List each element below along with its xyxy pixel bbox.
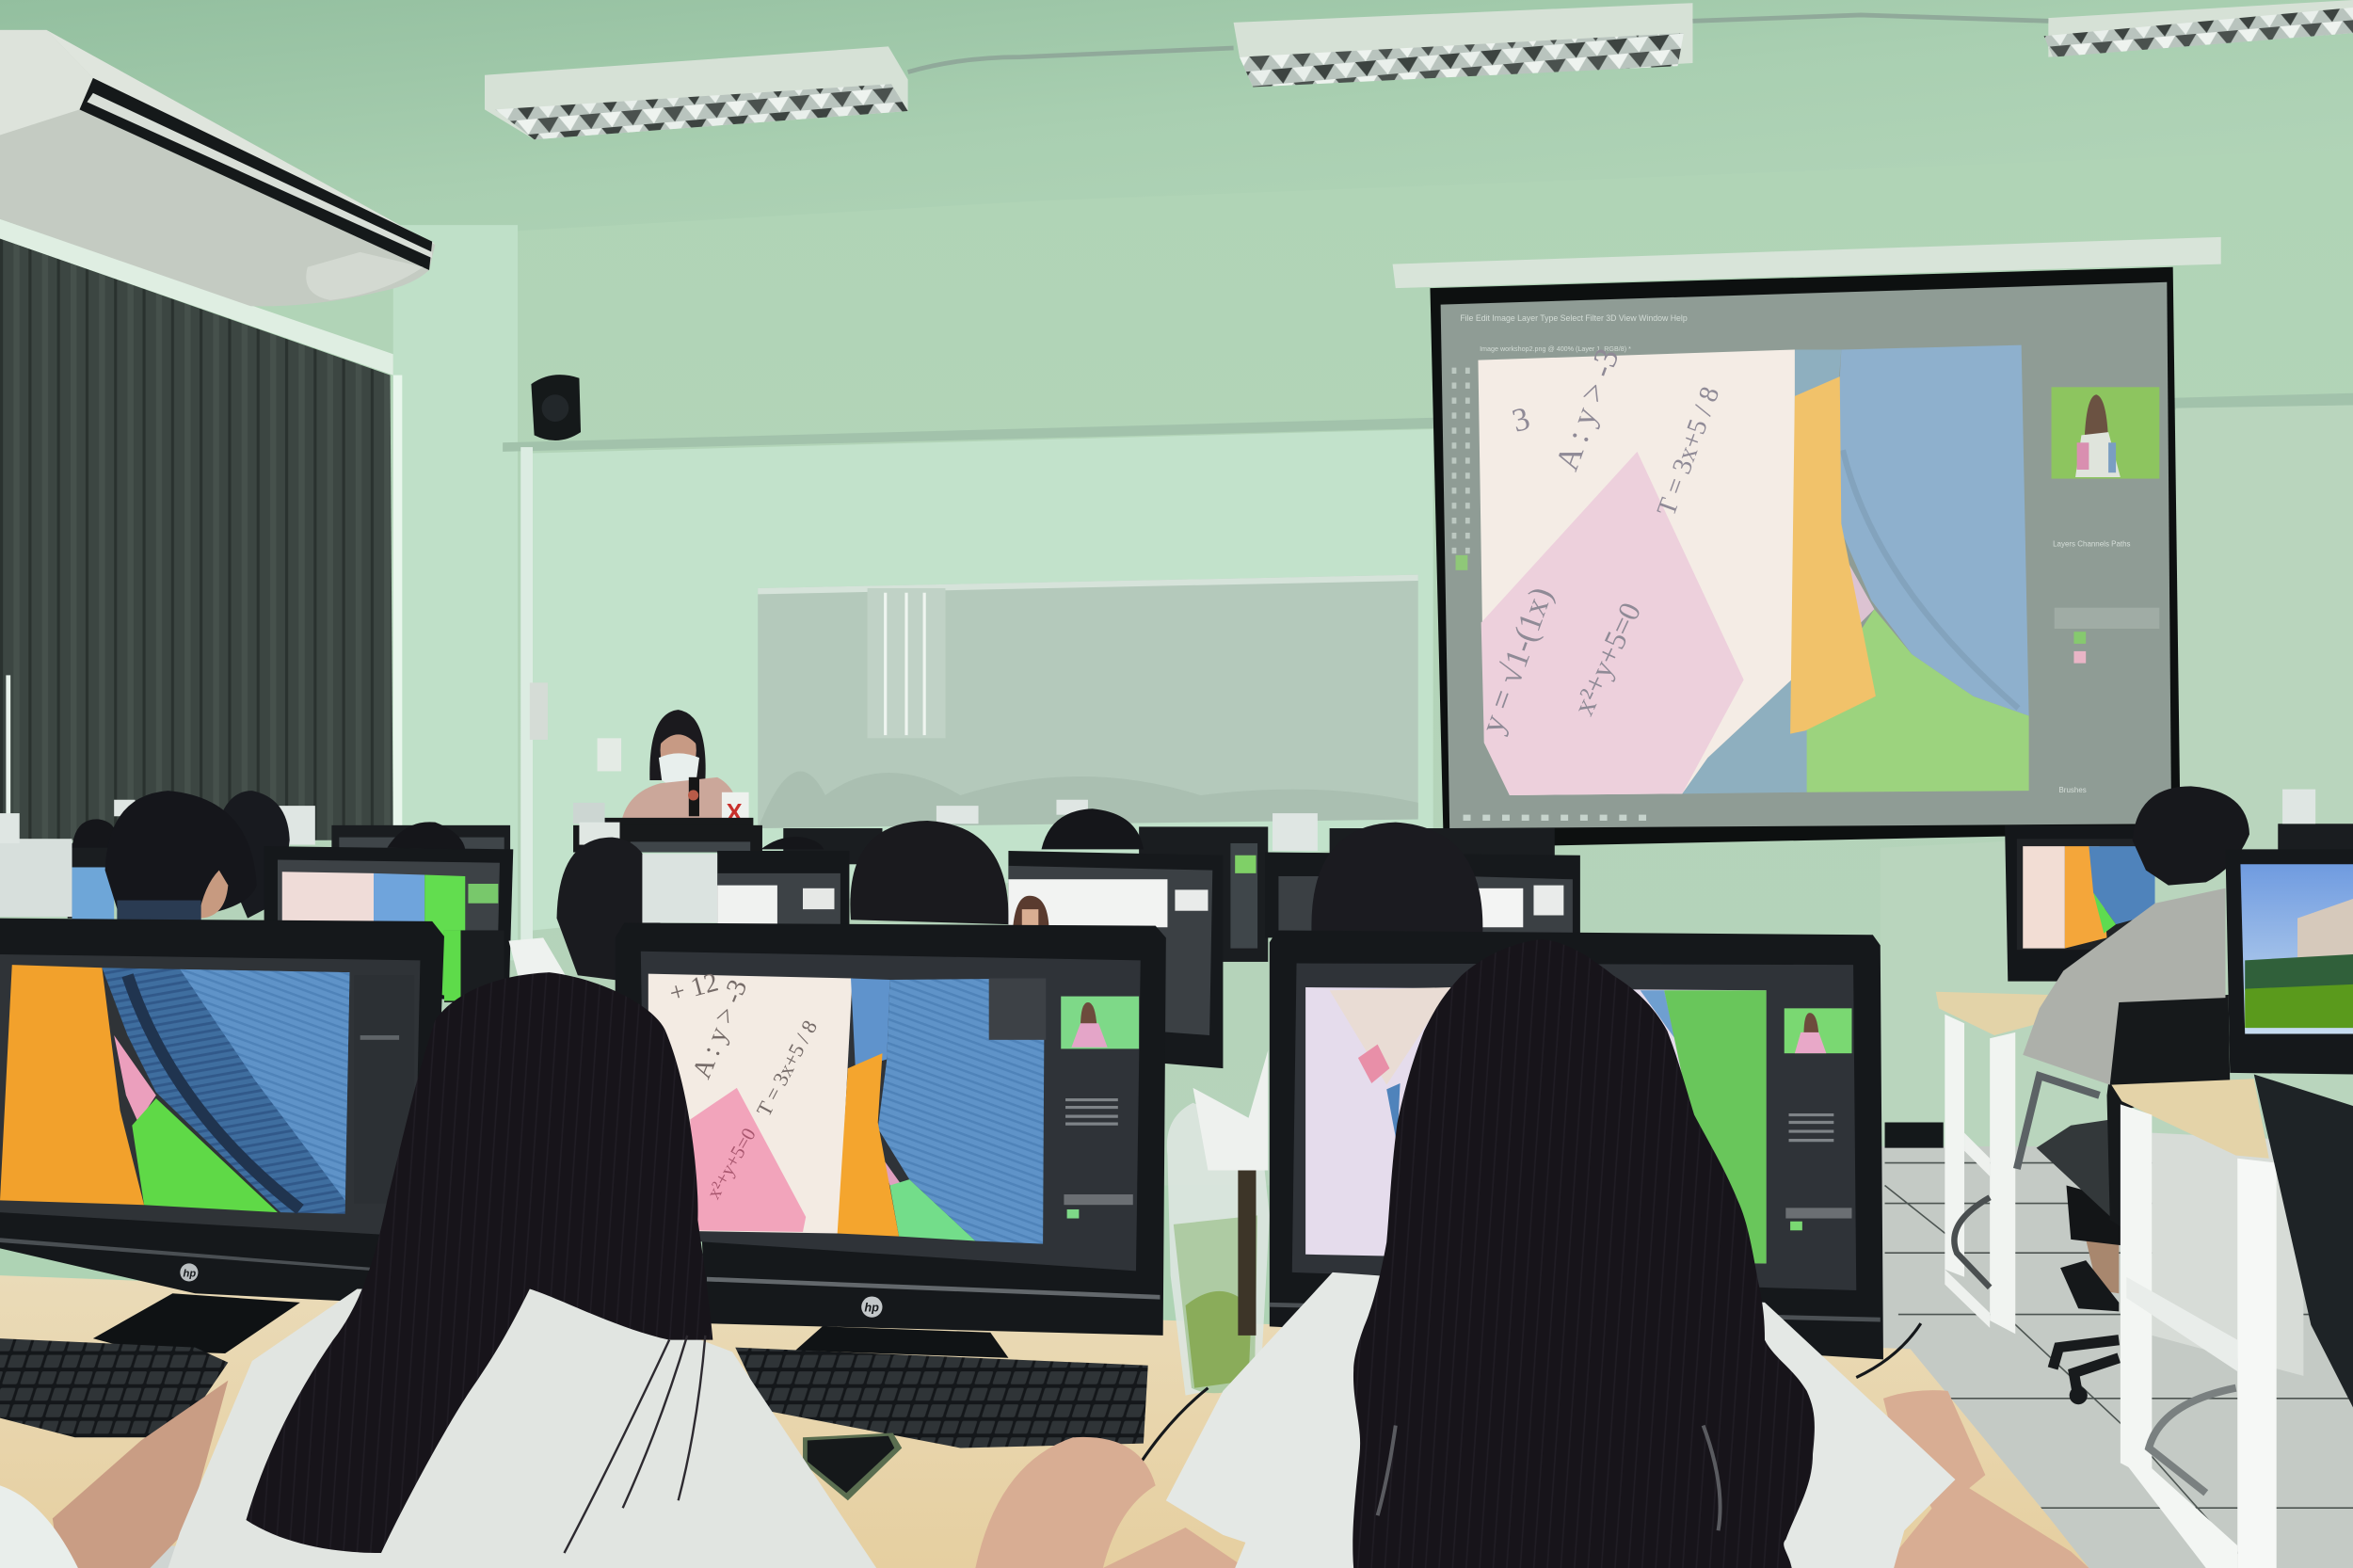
projected fabric fold: [1843, 450, 2018, 708]
ceiling light left: [485, 46, 908, 139]
screen: green background: [1664, 990, 1767, 1263]
front centre monitor: [616, 922, 1166, 1358]
lectern: [605, 818, 753, 826]
screen: blue knit fabric: [102, 968, 349, 1214]
window blinds: [0, 238, 393, 840]
neighbouring white sleeve: [1193, 1050, 1268, 1171]
left hand on mouse: [975, 1437, 1156, 1568]
screen handwriting: x²+y+5=0: [703, 1125, 760, 1203]
projected document tab: Image workshop2.png @ 400% (Layer 1, RGB/8) *: [1480, 345, 1631, 353]
front left keyboard: [0, 1338, 228, 1437]
screen: blue behind: [851, 978, 889, 1068]
right arm: [1883, 1480, 2089, 1568]
left forearm: [53, 1381, 228, 1568]
projected handwriting: [1473, 344, 1725, 738]
loose hair strands: [564, 1336, 705, 1553]
monitor stand: [93, 1293, 300, 1353]
projected orange note: [1790, 376, 1876, 734]
rear student small head: [387, 822, 465, 849]
hp logo: hp: [864, 1300, 879, 1314]
long black hair: [1353, 939, 1815, 1568]
back of person in foreground: [141, 1545, 381, 1568]
projected handwriting: y = √1-(1x): [1473, 583, 1560, 738]
rear monitor left: [264, 846, 513, 1002]
screen: pink note: [690, 1088, 806, 1232]
projected pink corner: [1846, 558, 1874, 623]
right student seated: [2017, 786, 2249, 1404]
shorts: [2066, 1185, 2121, 1245]
right rear desk: [1936, 992, 2050, 1334]
hp logo: [861, 1296, 883, 1318]
screen: side panel: [354, 975, 414, 1204]
rear student with glasses: [105, 791, 290, 921]
screen: orange note: [0, 965, 144, 1205]
ceiling: [0, 0, 2353, 232]
wall switches: [530, 682, 621, 771]
hp logo: [180, 1263, 198, 1281]
ceiling conduit: [908, 15, 2048, 72]
screen handwriting: + 12: [666, 967, 721, 1009]
shirt: [2023, 888, 2225, 1085]
chair back: [2107, 995, 2230, 1227]
screen: blue top: [1641, 990, 1674, 1038]
rear monitor centre: [1008, 851, 1223, 1068]
shirt: [168, 1288, 876, 1568]
small head behind: [760, 837, 824, 849]
rear student dark hair right: [1311, 823, 1482, 934]
screen: orange note: [838, 1053, 899, 1237]
ceiling light right: [2044, 0, 2353, 57]
projected navigator thumbnail: [2052, 387, 2159, 479]
screen handwriting: [666, 967, 822, 1203]
screen: layer rows: [1065, 1100, 1118, 1124]
screen: paper: [648, 974, 853, 1233]
monitor stand: [795, 1326, 1008, 1358]
rear paper sign centre: [642, 854, 717, 922]
floor: [1846, 1123, 2353, 1568]
right desktop monitor: [2225, 849, 2353, 1074]
projected handwriting: T = 3x+5 / 8: [1651, 383, 1725, 520]
right rear monitor: [2005, 825, 2155, 982]
chair armrest: [2017, 1076, 2100, 1169]
ceiling light centre: [1234, 3, 1692, 87]
projected handwriting: 3: [1508, 400, 1533, 440]
projected pink note: [1481, 452, 1744, 795]
shirt: [1166, 1272, 1955, 1568]
screen: green area: [132, 1098, 278, 1212]
front right monitor: [1270, 930, 1883, 1359]
screen: thumbnail: [1785, 1008, 1851, 1053]
screen: blue sweater: [878, 978, 1045, 1244]
screen: blue sliver: [1386, 1083, 1401, 1144]
projected handwriting: x²+y+5=0: [1567, 598, 1647, 720]
projected layer panel: [2053, 539, 2159, 794]
screen: lavender canvas: [1305, 987, 1767, 1263]
left side wall: [393, 225, 518, 960]
right lower wall: [1881, 405, 2353, 1156]
screen: thumbnail: [1061, 997, 1139, 1048]
projector screen housing: [1393, 237, 2221, 288]
projected handwriting: A : y > -3: [1548, 344, 1626, 475]
gap rear monitor: [444, 930, 504, 1002]
second lectern paper: [579, 823, 619, 845]
bezel stripe: [707, 1277, 1160, 1300]
screen: green background: [889, 1179, 975, 1240]
window blind highlight: [6, 675, 10, 825]
smartphone: [803, 1433, 902, 1500]
rear monitor centre-right: [1265, 853, 1580, 937]
leg: [2086, 1240, 2119, 1293]
projected layer panel: Brushes: [2059, 786, 2087, 794]
bezel stripe: [0, 1238, 376, 1271]
back wall: [0, 135, 2353, 1185]
conduit pipe: [520, 447, 533, 942]
air conditioner: [0, 30, 435, 306]
left forearm: [1103, 1528, 1245, 1568]
screen handwriting: A : y > -3: [686, 975, 753, 1082]
screen: pink sheet: [114, 1035, 156, 1123]
rear student dark hair centre: [850, 808, 1144, 924]
blind pelmet: [0, 219, 393, 376]
projection screen: [1430, 267, 2181, 848]
whiteboard: [758, 575, 1418, 828]
speaker: [531, 375, 581, 440]
lower wall panel: [533, 429, 1433, 930]
screen: fabric fold: [128, 975, 300, 1209]
red X card: X: [727, 800, 743, 826]
chair base: [2053, 1340, 2119, 1404]
rear student centre-left: [508, 838, 661, 983]
front right student: [975, 939, 2089, 1568]
paper sign near lectern: [573, 803, 605, 824]
plastic cup: [1167, 1103, 1270, 1396]
bezel stripe: [1270, 1303, 1881, 1322]
far row monitors: [68, 824, 2353, 962]
cables: [1141, 1323, 1921, 1463]
projected green: [1807, 609, 2029, 792]
projected canvas blue base: [1682, 349, 1841, 793]
projected app menu: File Edit Image Layer Type Select Filter 3D View Window Help: [1460, 313, 1688, 323]
long black hair: [246, 972, 712, 1553]
hp logo: hp: [184, 1269, 196, 1280]
far monitor behind lectern: [573, 825, 762, 853]
head: [2133, 786, 2249, 886]
wall rail line: [503, 393, 2353, 452]
right front desk: [2111, 1079, 2303, 1568]
hair highlights: [1378, 1426, 1721, 1530]
projected paper: [1478, 349, 1795, 795]
screen: paper corner: [1330, 987, 1451, 1085]
screen: history panel: [989, 978, 1046, 1040]
front desk: [0, 1275, 2089, 1568]
screen: binder clip: [1358, 1045, 1389, 1083]
projected toolbar: [1454, 368, 1467, 563]
rear student far left: [72, 819, 118, 921]
right hand: [1883, 1390, 1985, 1515]
front left student: [0, 972, 876, 1568]
right office chair: [2254, 1074, 2353, 1407]
paper signs: [0, 790, 2315, 917]
red X card: [722, 792, 749, 838]
screen: lighter knit: [180, 969, 349, 1200]
front centre keyboard: [735, 1348, 1148, 1448]
rear monitor centre-left: [717, 851, 849, 927]
screen: layer rows: [1789, 1115, 1833, 1141]
shoe: [2060, 1260, 2119, 1311]
projected blue fabric: [1835, 345, 2029, 715]
window glow strip: [393, 376, 402, 840]
screen: pink corner: [879, 1154, 902, 1185]
screen handwriting: T = 3x+5 / 8: [752, 1016, 822, 1120]
presenter: [621, 710, 742, 823]
neighbour sleeve: [0, 1485, 78, 1568]
chair seat: [2037, 1118, 2121, 1227]
projected layer panel: Layers Channels Paths: [2053, 539, 2131, 548]
front left monitor: [0, 919, 444, 1353]
projected taskbar icons: [1464, 816, 1651, 820]
